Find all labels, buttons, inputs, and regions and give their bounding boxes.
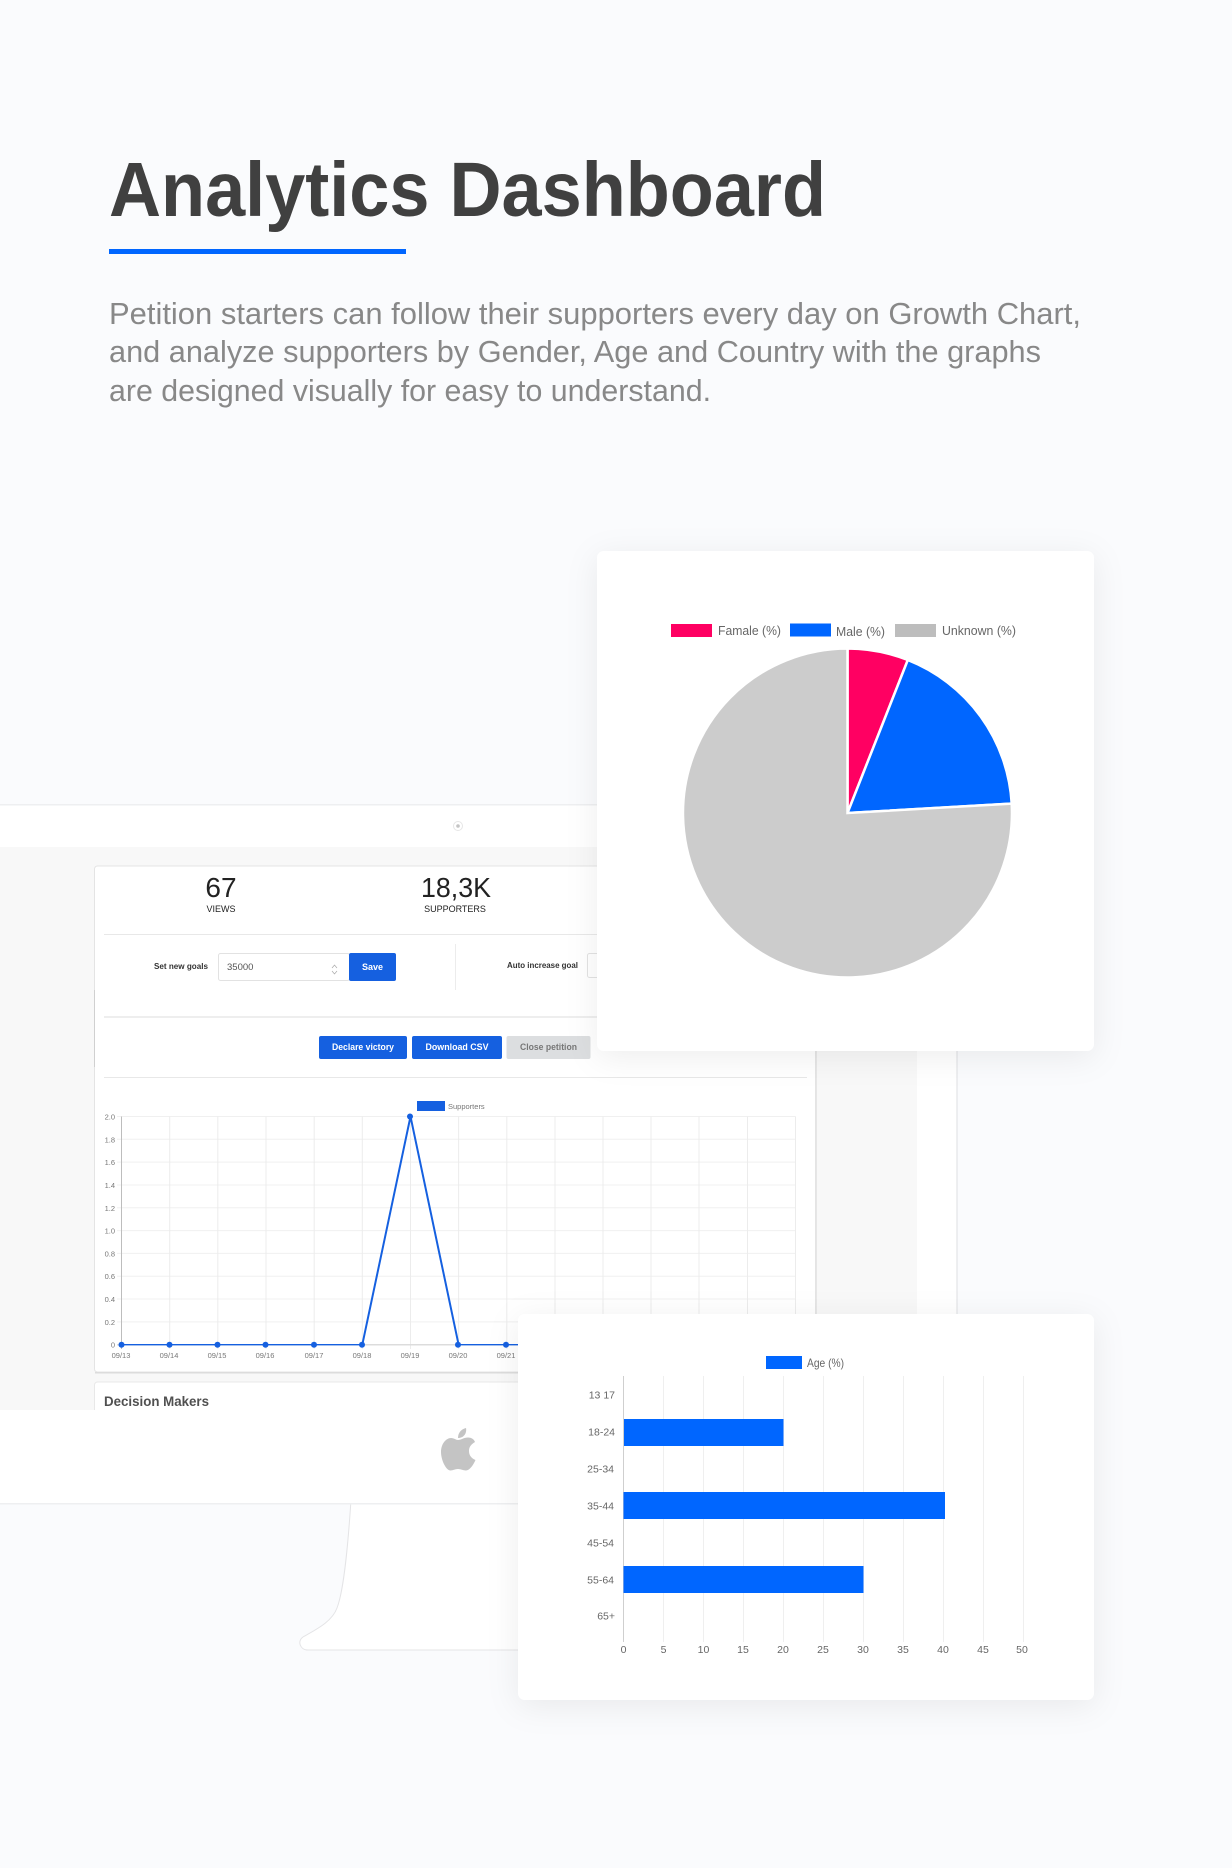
- icon: apple logo: [441, 1428, 476, 1470]
- value axis labels: 20: [777, 1644, 789, 1656]
- category labels: 55-64: [587, 1574, 614, 1586]
- y axis labels: 0.6: [105, 1272, 115, 1281]
- category labels: 65+: [597, 1610, 615, 1622]
- panel: dashboard card: [94, 866, 816, 1374]
- data line: [122, 1344, 362, 1346]
- stat: views: VIEWS: [206, 904, 236, 914]
- y axis labels: 0.8: [105, 1249, 115, 1258]
- x axis labels: 09/21: [497, 1351, 515, 1360]
- value axis labels: 50: [1016, 1644, 1028, 1656]
- y axis labels: 1.4: [105, 1181, 115, 1190]
- age legend: [766, 1356, 844, 1370]
- value axis labels: 0: [621, 1644, 627, 1656]
- pie legend: Unknown (%): [942, 623, 1016, 638]
- button: declare victory: [319, 1036, 407, 1059]
- panel: gender pie chart card: [597, 551, 1094, 1051]
- x axis labels: 09/15: [208, 1351, 226, 1360]
- title underline: [109, 249, 406, 254]
- y axis labels: 1.0: [105, 1227, 115, 1236]
- intro paragraph: [109, 296, 1081, 408]
- intro paragraph: Petition starters can follow their supporters every day on Growth Chart,: [109, 296, 1081, 331]
- category labels: 45-54: [587, 1538, 614, 1550]
- y axis labels: 1.8: [105, 1135, 115, 1144]
- value axis labels: 10: [698, 1644, 709, 1656]
- y axis labels: 1.6: [105, 1158, 115, 1167]
- bars: [624, 1419, 945, 1593]
- form: set new goals: [154, 953, 396, 981]
- form: auto increase goal: [507, 954, 618, 978]
- stat: views: 67: [205, 872, 237, 903]
- title: Analytics Dashboard: [109, 147, 826, 233]
- x axis labels: 09/20: [449, 1351, 467, 1360]
- y axis labels: 0.4: [105, 1295, 115, 1304]
- pie chart: [683, 648, 1012, 978]
- stat: supporters: 18,3K: [421, 872, 491, 903]
- panel: age bar chart card: [518, 1314, 1094, 1700]
- x axis labels: 09/19: [401, 1351, 419, 1360]
- panel: decision makers card: Decision Makers: [104, 1393, 209, 1409]
- x axis labels: 09/13: [112, 1351, 130, 1360]
- intro paragraph: are designed visually for easy to understand.: [109, 373, 711, 408]
- chart legend: [417, 1101, 485, 1111]
- form: set new goals: Set new goals: [154, 962, 209, 971]
- value axis labels: 40: [937, 1644, 949, 1656]
- pie legend: Famale (%): [718, 623, 781, 638]
- category labels: [587, 1390, 615, 1622]
- x axis labels: 09/18: [353, 1351, 371, 1360]
- monitor screen: [0, 847, 917, 1410]
- age legend: Age (%): [807, 1356, 844, 1370]
- data points: [118, 1114, 509, 1348]
- stat: supporters: SUPPORTERS: [424, 904, 486, 914]
- x axis labels: 09/17: [305, 1351, 323, 1360]
- y axis labels: 0.2: [105, 1318, 115, 1327]
- category labels: 13 17: [589, 1390, 615, 1402]
- button: declare victory: Declare victory: [332, 1042, 394, 1052]
- category labels: 18-24: [588, 1426, 615, 1438]
- button: close petition: [506, 1036, 590, 1059]
- line chart: supporters: [105, 1101, 796, 1360]
- button: close petition: Close petition: [520, 1042, 577, 1052]
- button: download csv: [412, 1036, 502, 1059]
- chart legend: Supporters: [448, 1102, 485, 1111]
- value axis labels: 30: [857, 1644, 869, 1656]
- form: set new goals: Save: [362, 962, 383, 972]
- pie legend: Male (%): [836, 624, 885, 639]
- value axis labels: 15: [737, 1644, 749, 1656]
- y axis labels: 0: [111, 1341, 115, 1350]
- panel: decision makers card: [94, 1382, 816, 1422]
- y axis labels: 1.2: [105, 1204, 115, 1213]
- form: set new goals: 35000: [227, 962, 253, 973]
- y axis labels: [105, 1112, 115, 1350]
- x axis labels: 09/14: [160, 1351, 178, 1360]
- monitor top bezel: [0, 805, 957, 847]
- category labels: 25-34: [587, 1464, 614, 1476]
- monitor right bezel: [917, 805, 957, 1504]
- y axis labels: 2.0: [105, 1112, 115, 1122]
- category labels: 35-44: [587, 1500, 614, 1512]
- value axis labels: 25: [817, 1644, 829, 1656]
- value axis labels: 35: [897, 1644, 909, 1656]
- icon: camera: [454, 822, 462, 830]
- button: download csv: Download CSV: [426, 1042, 488, 1052]
- monitor: [0, 804, 958, 1504]
- value axis labels: 45: [977, 1644, 989, 1656]
- page column: [780, 847, 816, 1410]
- x axis labels: 09/16: [256, 1351, 274, 1360]
- value axis labels: 5: [661, 1644, 667, 1656]
- pie legend: [671, 623, 1016, 639]
- x axis labels: [112, 1351, 515, 1360]
- form: auto increase goal: Auto increase goal: [507, 961, 578, 970]
- monitor chin: [0, 1410, 957, 1503]
- value axis labels: [621, 1644, 1028, 1656]
- monitor stand: [300, 1500, 610, 1650]
- intro paragraph: and analyze supporters by Gender, Age and Country with the graphs: [109, 334, 1041, 369]
